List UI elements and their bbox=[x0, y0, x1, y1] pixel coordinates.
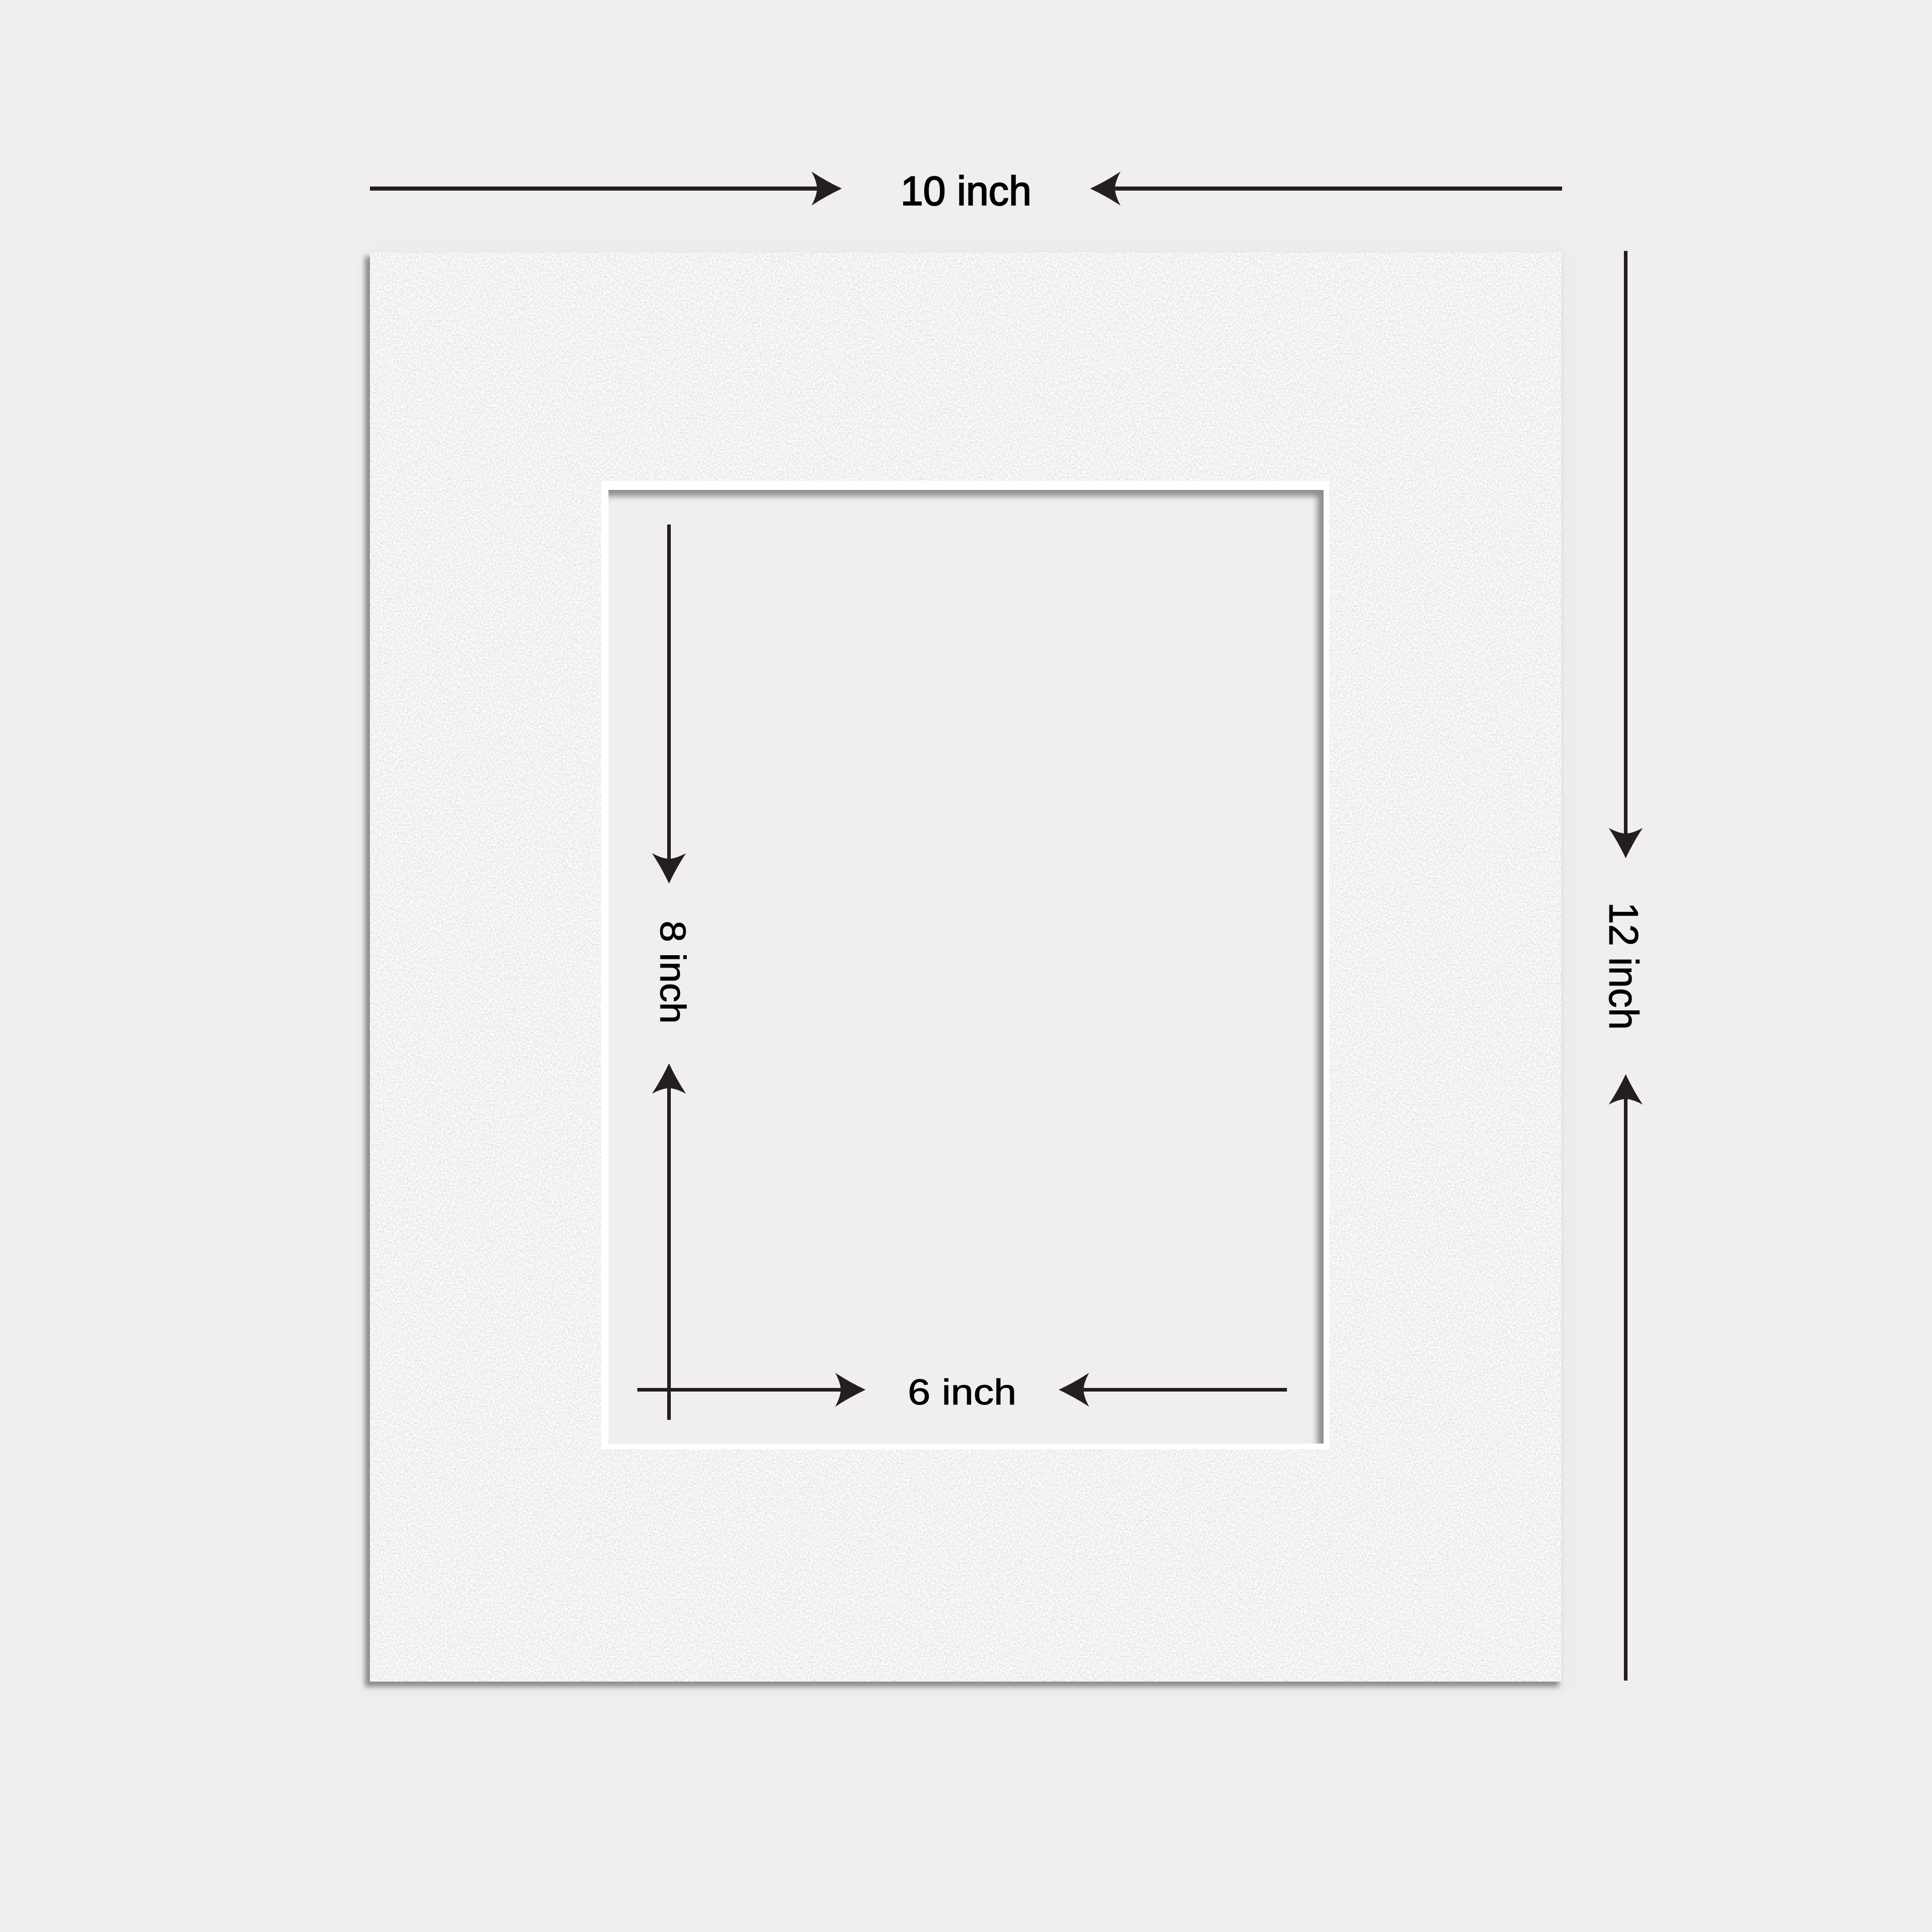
arrow: right height, pointing up bbox=[1608, 1074, 1642, 1681]
label: 12 inch: 12 inch bbox=[1601, 902, 1647, 1030]
arrow: window width, pointing right bbox=[637, 1372, 866, 1406]
mat paper surface bbox=[370, 252, 1562, 1682]
arrow: top width, pointing right bbox=[370, 172, 842, 206]
arrow: top width, pointing left bbox=[1090, 172, 1562, 206]
window inner shadow bbox=[608, 490, 1324, 1444]
label: 10 inch: 10 inch bbox=[901, 168, 1031, 214]
white bevel of the window bbox=[601, 481, 1329, 1449]
window opening bbox=[608, 490, 1324, 1444]
mat outer glow bbox=[364, 246, 1569, 1695]
label: 8 inch: 8 inch bbox=[653, 921, 693, 1024]
label: 6 inch: 6 inch bbox=[908, 1372, 1016, 1412]
arrow: window height, pointing down bbox=[652, 524, 686, 884]
arrow: window height, pointing up bbox=[652, 1063, 686, 1420]
mat drop shadow bbox=[365, 257, 1559, 1687]
panel: mat board bbox=[364, 246, 1569, 1695]
arrow: right height, pointing down bbox=[1608, 251, 1642, 858]
arrow: window width, pointing left bbox=[1059, 1372, 1287, 1406]
